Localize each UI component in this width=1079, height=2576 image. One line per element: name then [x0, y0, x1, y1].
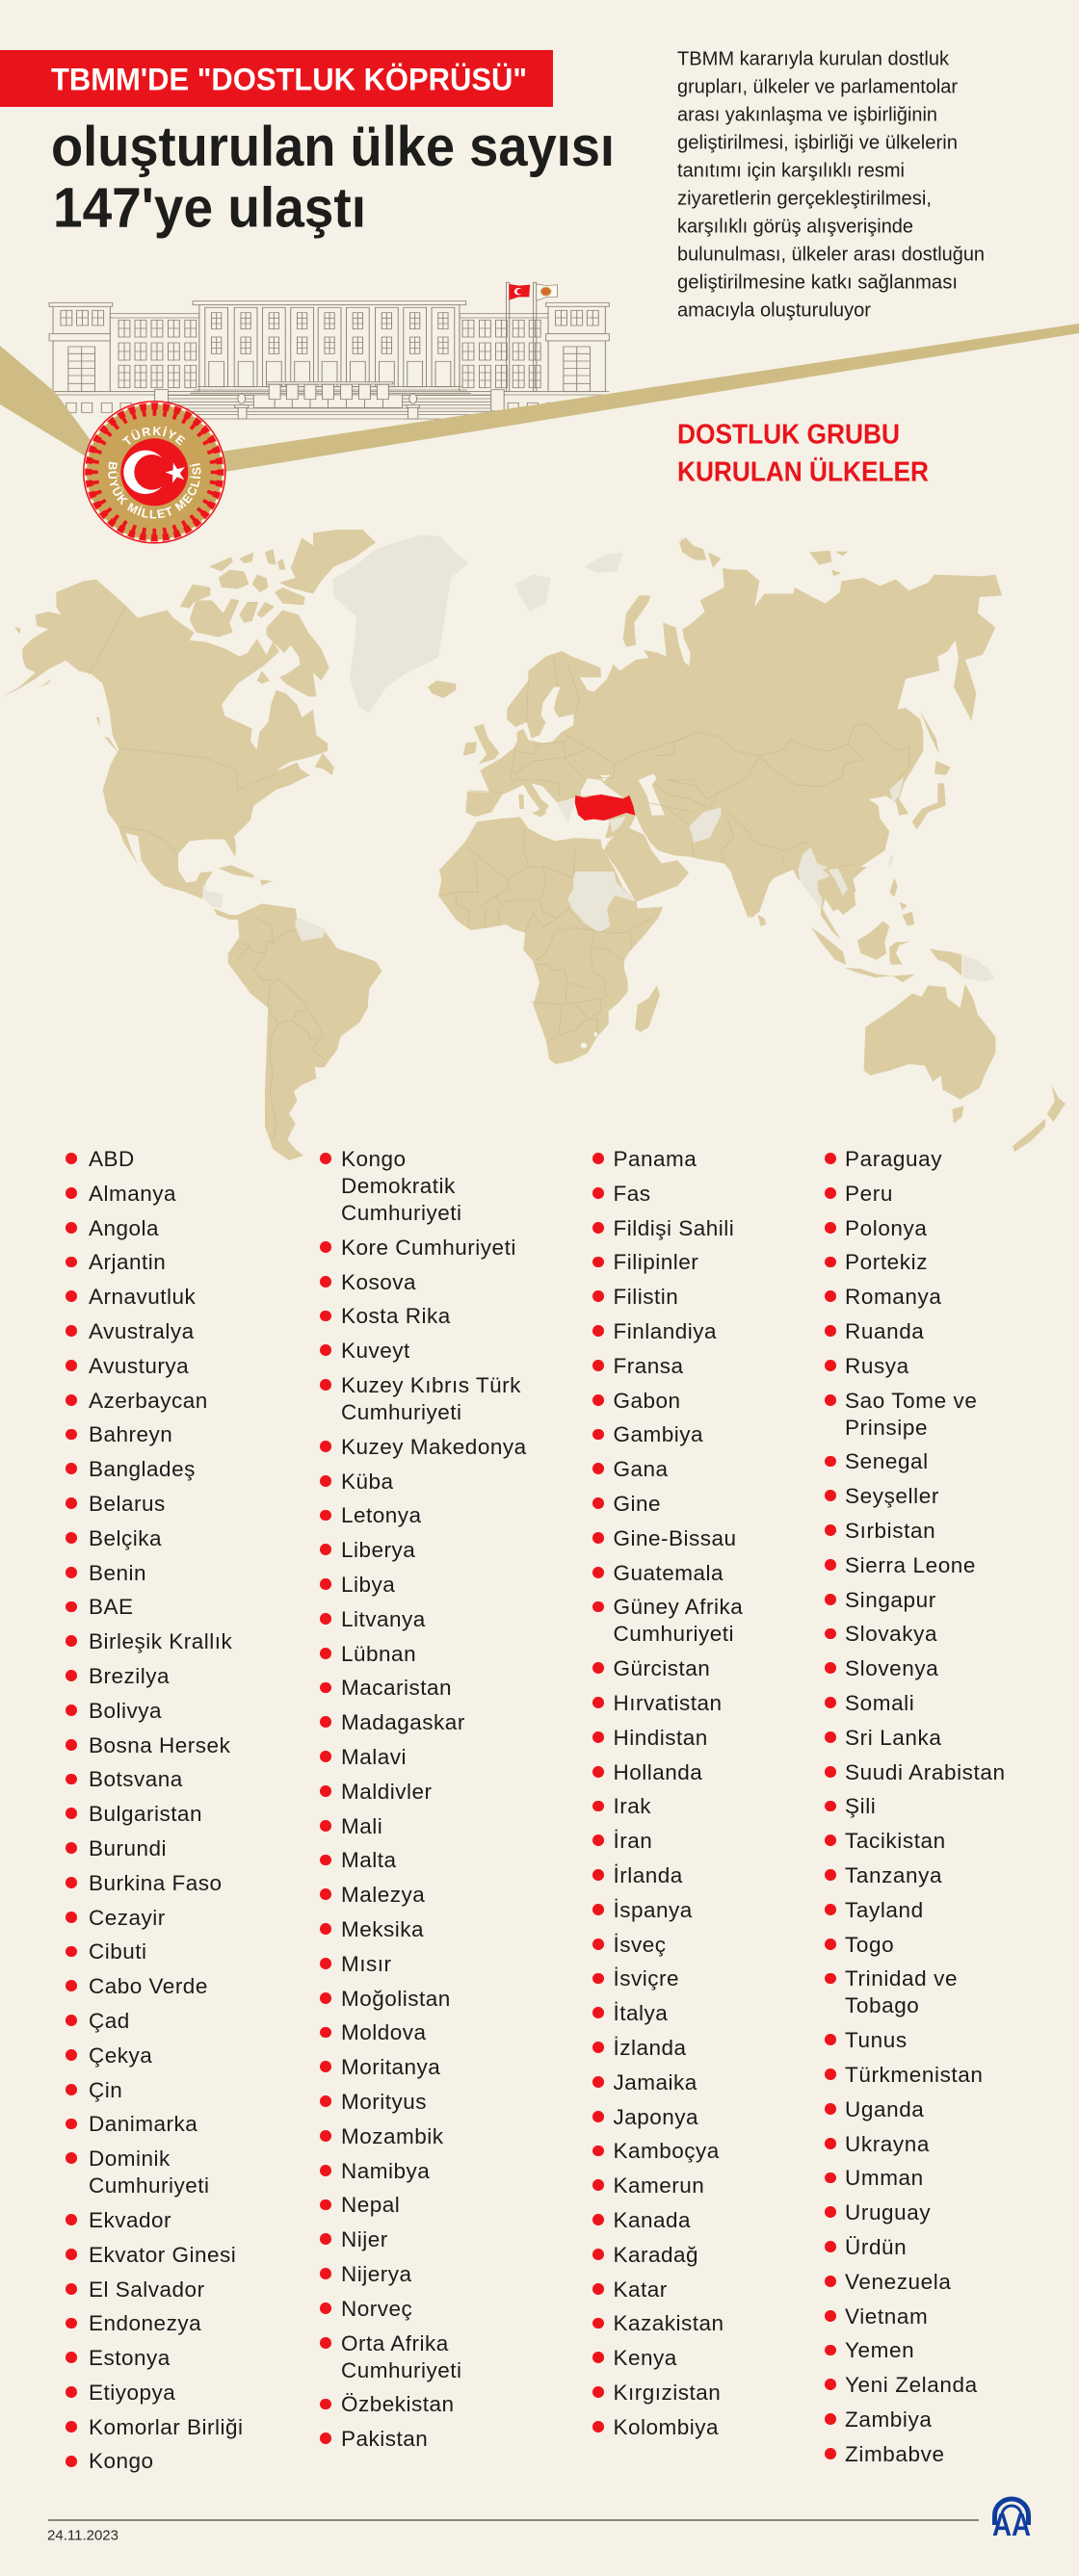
country list: column 4: Senegal — [845, 1449, 929, 1473]
country list: column 3: Kanada — [613, 2208, 691, 2232]
country list: column 4: Rusya — [845, 1354, 909, 1378]
country list: column 1: Cezayir — [89, 1906, 166, 1930]
country list: column 1: Kongo — [89, 2449, 154, 2473]
country list: column 4: Yeni Zelanda — [845, 2373, 978, 2397]
country list: column 2: Cumhuriyeti — [341, 2357, 462, 2382]
country list: column 4: Ürdün — [845, 2235, 907, 2259]
country list: column 2: Küba — [341, 1470, 394, 1494]
country list: column 3: İspanya — [613, 1898, 693, 1922]
country list: column 4: Umman — [845, 2166, 924, 2190]
country list: column 3: Jamaika — [613, 2070, 697, 2095]
country list: column 4: Sri Lanka — [845, 1726, 941, 1750]
intro paragraph: geliştirilmesine katkı sağlanması — [677, 273, 958, 294]
country list: column 4: Trinidad ve — [845, 1966, 958, 1991]
country list: column 2: Macaristan — [341, 1676, 452, 1700]
country list: column 2: Madagaskar — [341, 1710, 465, 1734]
country list: column 4: Peru — [845, 1182, 893, 1206]
country list: column 2: Kosta Rika — [341, 1304, 451, 1328]
country list: column 4: Vietnam — [845, 2303, 928, 2329]
map: Greenland — [332, 534, 469, 714]
country list: column 4: Paraguay — [845, 1147, 942, 1171]
country list: column 2: Mozambik — [341, 2124, 444, 2148]
intro paragraph — [677, 49, 985, 322]
country list: column 2: Cumhuriyeti — [341, 1400, 462, 1424]
country list: column 3: Filistin — [613, 1285, 678, 1309]
country list: column 3: Güney Afrika — [613, 1595, 743, 1619]
country list: column 4: Romanya — [845, 1285, 942, 1309]
country list: column 4 — [825, 1147, 1006, 2466]
country list: column 2: Norveç — [341, 2297, 412, 2321]
intro paragraph: grupları, ülkeler ve parlamentolar — [677, 77, 958, 98]
country list: column 3: İsveç — [613, 1933, 667, 1957]
country list: column 1: El Salvador — [89, 2277, 205, 2302]
world map — [2, 530, 1066, 1160]
country list: column 1: Burundi — [89, 1836, 167, 1860]
heading — [51, 116, 615, 239]
country list: column 4: Ukrayna — [845, 2132, 930, 2156]
right tower — [546, 302, 609, 392]
country list: column 3: Kolombiya — [613, 2415, 719, 2439]
country list: column 3: Katar — [613, 2277, 668, 2302]
subheading — [677, 420, 929, 487]
country list: column 2: Mısır — [341, 1952, 391, 1976]
country list: column 1: Azerbaycan — [89, 1389, 208, 1413]
country list: column 3: Gürcistan — [613, 1656, 710, 1680]
country list: column 2: Nijer — [341, 2227, 388, 2251]
country list: column 3: Fas — [613, 1182, 651, 1206]
country list: column 4: Prinsipe — [845, 1416, 928, 1440]
country list: column 2: Namibya — [341, 2159, 430, 2183]
portico — [253, 382, 403, 407]
intro paragraph: karşılıklı görüş alışverişinde — [677, 217, 913, 238]
country list: column 2: Kuzey Makedonya — [341, 1435, 527, 1459]
country list: column 2: Meksika — [341, 1917, 424, 1941]
country list: column 3: Fransa — [613, 1354, 684, 1378]
country list: column 1: Çad — [89, 2009, 130, 2033]
country list: column 1: Bosna Hersek — [89, 1733, 230, 1757]
country list: column 4: Tacikistan — [845, 1829, 946, 1853]
country list: column 1: BAE — [89, 1595, 134, 1619]
country list: column 4: Sırbistan — [845, 1519, 935, 1543]
country list: column 1: Bolivya — [89, 1699, 162, 1723]
country list: column 4: Tanzanya — [845, 1863, 942, 1887]
country list: column 3: Panama — [613, 1147, 697, 1171]
country list: column 2: Kuzey Kıbrıs Türk — [341, 1373, 521, 1397]
country list: column 4: Türkmenistan — [845, 2063, 983, 2087]
country list: column 2: Malta — [341, 1848, 397, 1872]
country list: column 1: Brezilya — [89, 1664, 170, 1688]
country list: column 2: Morityus — [341, 2090, 427, 2114]
country list: column 3: Finlandiya — [613, 1319, 717, 1343]
intro paragraph: geliştirilmesi, işbirliği ve ülkelerin — [677, 133, 958, 154]
country list: column 3: Hollanda — [613, 1760, 702, 1784]
country list: column 1: Bangladeş — [89, 1457, 196, 1481]
icon: Turkish flag — [509, 284, 530, 300]
title bar: TBMM'DE "DOSTLUK KÖPRÜSÜ" — [51, 62, 527, 96]
country list: column 1 — [66, 1147, 244, 2473]
intro paragraph: ziyaretlerin gerçekleştirilmesi, — [677, 189, 932, 210]
country list: column 4: Seyşeller — [845, 1484, 939, 1508]
country list: column 2: Litvanya — [341, 1607, 426, 1631]
heading: oluşturulan ülke sayısı — [51, 116, 615, 178]
country list: column 2 — [320, 1147, 527, 2451]
emblem: TBMM seal — [83, 401, 226, 544]
country list: column 1: Ekvador — [89, 2208, 171, 2232]
map: Africa — [438, 817, 663, 1064]
country list: column 1: Benin — [89, 1561, 146, 1585]
country list: column 1: Birleşik Krallık — [89, 1629, 232, 1653]
gold ribbon — [0, 324, 1079, 472]
country list: column 4: Ruanda — [845, 1319, 924, 1343]
country list: column 1: Avusturya — [89, 1354, 189, 1378]
emblem: TBMM seal: TÜRKİYE — [121, 426, 185, 446]
country list: column 3: Hindistan — [613, 1726, 708, 1750]
country list: column 2: Nepal — [341, 2193, 400, 2217]
illustration: parliament building — [49, 282, 609, 419]
country list: column 2: Malavi — [341, 1745, 407, 1769]
subheading: DOSTLUK GRUBU — [677, 420, 900, 451]
country list: column 2: Orta Afrika — [341, 2330, 449, 2355]
logo: AA: AA — [992, 2507, 1031, 2542]
country list: column 1: Arjantin — [89, 1250, 166, 1274]
country list: column 2: Pakistan — [341, 2427, 428, 2451]
country list: column 2: Lübnan — [341, 1642, 416, 1666]
country list: column 4: Sao Tome ve — [845, 1389, 978, 1413]
country list: column 3: Kamboçya — [613, 2139, 720, 2163]
intro paragraph: arası yakınlaşma ve işbirliğinin — [677, 105, 937, 126]
country list: column 1: Endonezya — [89, 2311, 201, 2335]
country list: column 2: Liberya — [341, 1538, 415, 1562]
country list: column 3: İsviçre — [613, 1966, 679, 1991]
country list: column 4: Slovakya — [845, 1622, 937, 1646]
map: Europe and Middle East — [428, 537, 694, 902]
country list: column 4: Tobago — [845, 1993, 919, 2017]
country list: column 1: Belçika — [89, 1526, 162, 1550]
country list: column 2: Maldivler — [341, 1780, 433, 1804]
map: Asia — [655, 537, 1002, 918]
country list: column 3: Gine — [613, 1492, 661, 1516]
footer rule — [48, 2519, 979, 2521]
title bar — [0, 50, 553, 107]
country list: column 1: Angola — [89, 1216, 159, 1240]
country list: column 3: Gine-Bissau — [613, 1526, 737, 1550]
country list: column 1: Bulgaristan — [89, 1802, 202, 1826]
country list: column 3: Karadağ — [613, 2243, 698, 2267]
country list: column 1: Avustralya — [89, 1319, 195, 1343]
country list: column 2: Letonya — [341, 1503, 422, 1527]
country list: column 2: Moğolistan — [341, 1987, 451, 2011]
country list: column 3: Japonya — [613, 2105, 698, 2129]
intro paragraph: bulunulması, ülkeler arası dostluğun — [677, 245, 985, 266]
country list: column 1: Burkina Faso — [89, 1871, 223, 1895]
country list: column 4: Zimbabve — [845, 2442, 945, 2466]
country list: column 4: Tayland — [845, 1898, 924, 1922]
country list: column 1: Etiyopya — [89, 2381, 175, 2405]
country list: column 3: Irak — [613, 1794, 651, 1818]
icon: parliament flag — [537, 284, 558, 300]
base and stairs — [54, 387, 609, 419]
heading: 147'ye ulaştı — [53, 177, 366, 239]
map: European borders — [469, 658, 694, 812]
country list: column 3: Kenya — [613, 2346, 677, 2370]
country list: column 1: Cabo Verde — [89, 1974, 208, 1998]
central block — [193, 301, 466, 387]
country list: column 4: Slovenya — [845, 1656, 938, 1680]
country list: column 4: Şili — [845, 1794, 876, 1818]
country list: column 1: Dominik — [89, 2147, 171, 2171]
country list: column 1: Komorlar Birliği — [89, 2415, 244, 2439]
country list: column 2: Kuveyt — [341, 1339, 410, 1363]
country list: column 3 — [592, 1147, 743, 2439]
left tower — [49, 302, 113, 392]
country list: column 3: Fildişi Sahili — [613, 1216, 734, 1240]
country list: column 3: Kırgızistan — [613, 2381, 721, 2405]
subheading: KURULAN ÜLKELER — [677, 456, 929, 487]
country list: column 3: İzlanda — [613, 2036, 687, 2060]
country list: column 4: Sierra Leone — [845, 1553, 976, 1577]
country list: column 1: Danimarka — [89, 2112, 197, 2136]
country list: column 1: Botsvana — [89, 1767, 183, 1791]
piers and urns — [155, 390, 504, 419]
country list: column 1: ABD — [89, 1147, 135, 1171]
country list: column 2: Cumhuriyeti — [341, 1201, 462, 1225]
country list: column 1: Almanya — [89, 1182, 176, 1206]
intro paragraph: amacıyla oluşturuluyor — [677, 300, 871, 322]
country list: column 3: İtalya — [613, 2001, 668, 2025]
country list: column 3: Filipinler — [613, 1250, 698, 1274]
country list: column 2: Libya — [341, 1573, 395, 1597]
country list: column 4: Togo — [845, 1933, 894, 1957]
country list: column 1: Çin — [89, 2078, 122, 2102]
country list: column 2: Moldova — [341, 2020, 427, 2044]
map: North America — [2, 530, 376, 908]
country list: column 3: Gabon — [613, 1389, 681, 1413]
map: South America — [214, 903, 382, 1160]
map: seas — [581, 773, 665, 816]
country list: column 1: Cumhuriyeti — [89, 2173, 210, 2198]
country list: column 3: Guatemala — [613, 1561, 724, 1585]
left wing — [110, 314, 199, 392]
country list: column 1: Çekya — [89, 2043, 152, 2068]
emblem: TBMM seal: BÜYÜK MİLLET MECLİSİ — [108, 462, 200, 518]
country list: column 4: Somali — [845, 1691, 914, 1715]
intro paragraph: tanıtımı için karşılıklı resmi — [677, 161, 905, 182]
country list: column 1: Ekvator Ginesi — [89, 2243, 236, 2267]
country list: column 4: Portekiz — [845, 1250, 928, 1274]
intro paragraph: TBMM kararıyla kurulan dostluk — [677, 49, 950, 70]
country list: column 3: İrlanda — [613, 1863, 683, 1887]
country list: column 2: Kongo — [341, 1147, 407, 1171]
country list: column 2: Özbekistan — [341, 2392, 455, 2416]
country list: column 3: Gambiya — [613, 1422, 703, 1446]
country list: column 2: Moritanya — [341, 2055, 440, 2079]
country list: column 4: Tunus — [845, 2028, 908, 2052]
country list: column 2: Demokratik — [341, 1174, 456, 1198]
country list: column 2: Kore Cumhuriyeti — [341, 1236, 516, 1260]
right wing — [460, 314, 548, 392]
country list: column 2: Malezya — [341, 1883, 425, 1907]
country list: column 1: Estonya — [89, 2346, 171, 2370]
country list: column 4: Suudi Arabistan — [845, 1760, 1006, 1784]
date: 24.11.2023 — [47, 2527, 118, 2544]
country list: column 1: Arnavutluk — [89, 1285, 196, 1309]
map: Southeast Asia and Oceania — [730, 867, 1066, 1152]
country list: column 3: İran — [613, 1829, 652, 1853]
country list: column 4: Polonya — [845, 1216, 928, 1240]
country list: column 2: Nijerya — [341, 2262, 412, 2286]
country list: column 4: Yemen — [845, 2338, 914, 2362]
country list: column 3: Kazakistan — [613, 2311, 724, 2335]
country list: column 4: Singapur — [845, 1588, 936, 1612]
country list: column 4: Venezuela — [845, 2270, 952, 2294]
country list: column 3: Gana — [613, 1457, 669, 1481]
country list: column 1: Belarus — [89, 1492, 166, 1516]
country list: column 3: Hırvatistan — [613, 1691, 723, 1715]
country list: column 1: Bahreyn — [89, 1422, 172, 1446]
flag poles — [507, 282, 537, 392]
country list: column 4: Uganda — [845, 2097, 924, 2121]
map: Turkey highlighted — [575, 794, 635, 820]
country list: column 4: Uruguay — [845, 2200, 931, 2225]
country list: column 3: Kamerun — [613, 2173, 704, 2198]
country list: column 2: Mali — [341, 1814, 382, 1838]
country list: column 2: Kosova — [341, 1270, 416, 1294]
country list: column 4: Zambiya — [845, 2407, 932, 2432]
country list: column 3: Cumhuriyeti — [613, 1622, 734, 1646]
country list: column 1: Cibuti — [89, 1939, 147, 1964]
